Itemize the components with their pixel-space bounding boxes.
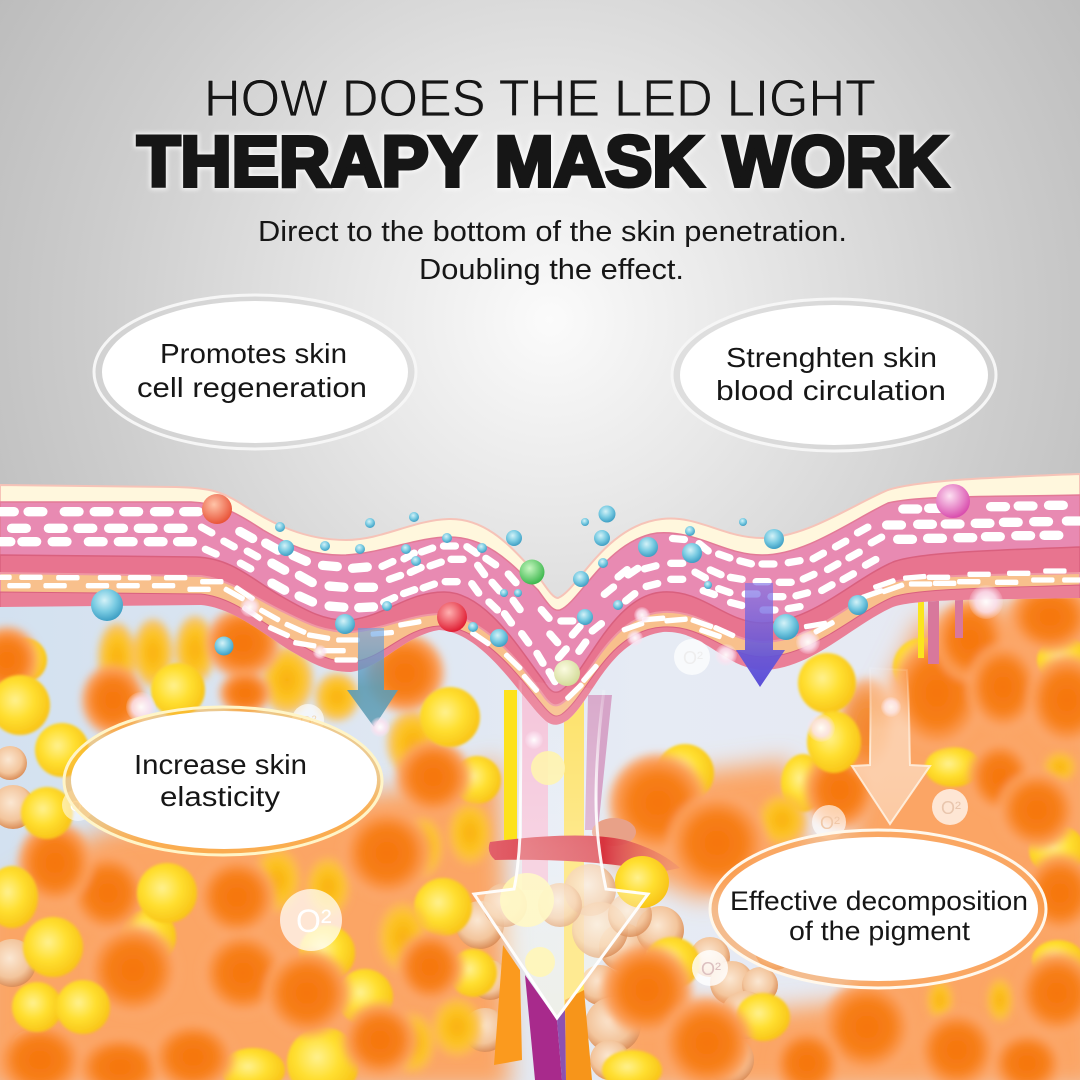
orange fat cells (blurred) <box>0 581 1080 1080</box>
callout: promotes skin cell regeneration: Promotes skin <box>160 338 347 369</box>
blue water bubbles <box>91 506 868 656</box>
violet down arrow <box>736 583 785 687</box>
callout: promotes skin cell regeneration: cell regeneration <box>137 372 367 403</box>
blue bubble on violet arrow <box>773 614 799 640</box>
callout: effective decomposition of the pigment: Effective decomposition <box>730 886 1028 916</box>
subtitle line 2: Doubling the effect. <box>419 254 684 286</box>
title <box>137 70 948 202</box>
arrow shape <box>474 680 648 1018</box>
cell dashes in skin: right half <box>532 501 1080 702</box>
central large white arrow <box>474 680 648 1018</box>
front yellow fat cells <box>0 653 861 1034</box>
peach fat cells <box>0 746 795 1080</box>
badge: large oxygen: O² <box>296 903 332 939</box>
skin layer: cream surface <box>0 474 1080 1080</box>
skin layer: orange band <box>0 573 1080 1080</box>
teal down arrow <box>347 628 398 727</box>
badge: oxygen left: O² <box>300 713 317 730</box>
sky backdrop <box>0 590 1080 1080</box>
title line 2 glow: THERAPY MASK WORK <box>137 123 948 202</box>
badge: oxygen lower <box>692 950 728 986</box>
yellow cell over band <box>615 856 669 908</box>
badge: oxygen center-right: O² <box>820 813 840 833</box>
skin layer: rose dermis <box>0 547 1080 1080</box>
pale cells inside central arrow <box>483 864 652 958</box>
callout: strengthen skin blood circulation: blood circulation <box>716 375 946 406</box>
subtitle line 1: Direct to the bottom of the skin penetration. <box>258 216 847 248</box>
amber fat cells <box>98 616 1076 1073</box>
callout: increase skin elasticity <box>64 707 382 855</box>
O2 badges <box>62 639 968 986</box>
title line 1: HOW DOES THE LED LIGHT <box>204 70 876 128</box>
back yellow fat cells <box>3 636 1080 1080</box>
fat tissue area <box>0 581 1080 1080</box>
callout: strengthen skin blood circulation: Strenghten skin <box>726 342 937 373</box>
colored balls <box>202 484 970 686</box>
red vessel band <box>489 835 680 872</box>
pink bubble on teal arrow <box>370 717 390 737</box>
cell dashes in skin: left half <box>0 507 540 694</box>
subtitle <box>258 216 847 286</box>
skin layer: lower rim <box>0 585 1080 1080</box>
callout: effective decomposition of the pigment <box>710 830 1046 988</box>
badge: oxygen center-right <box>812 805 846 839</box>
callout: effective decomposition of the pigment: of the pigment <box>789 916 971 946</box>
blood vessels <box>494 598 963 1080</box>
callout: strengthen skin blood circulation <box>672 299 996 451</box>
title line 2: THERAPY MASK WORK <box>137 123 948 202</box>
callout: promotes skin cell regeneration <box>94 295 416 449</box>
center-arrow yellow bubbles <box>500 751 565 977</box>
skin cross-section <box>0 474 1080 1080</box>
base tissue colour <box>0 590 1080 1080</box>
soft pink bubbles <box>126 585 1003 749</box>
callout: increase skin elasticity: Increase skin <box>134 749 307 780</box>
badge: oxygen far left: O² <box>70 798 87 815</box>
badge: oxygen right: O² <box>941 798 961 818</box>
badge: oxygen left <box>292 704 324 736</box>
badge: oxygen right <box>932 789 968 825</box>
callout: increase skin elasticity: elasticity <box>160 781 280 812</box>
skin layer: pink epidermis <box>0 495 1080 1080</box>
badge: oxygen far left <box>62 789 94 821</box>
badge: oxygen near skin <box>674 639 710 675</box>
badge: large oxygen <box>280 889 342 951</box>
rose cell behind band <box>592 818 636 842</box>
badge: oxygen lower: O² <box>701 959 721 979</box>
peach down arrow <box>852 668 930 824</box>
badge: oxygen near skin: O² <box>683 648 703 668</box>
